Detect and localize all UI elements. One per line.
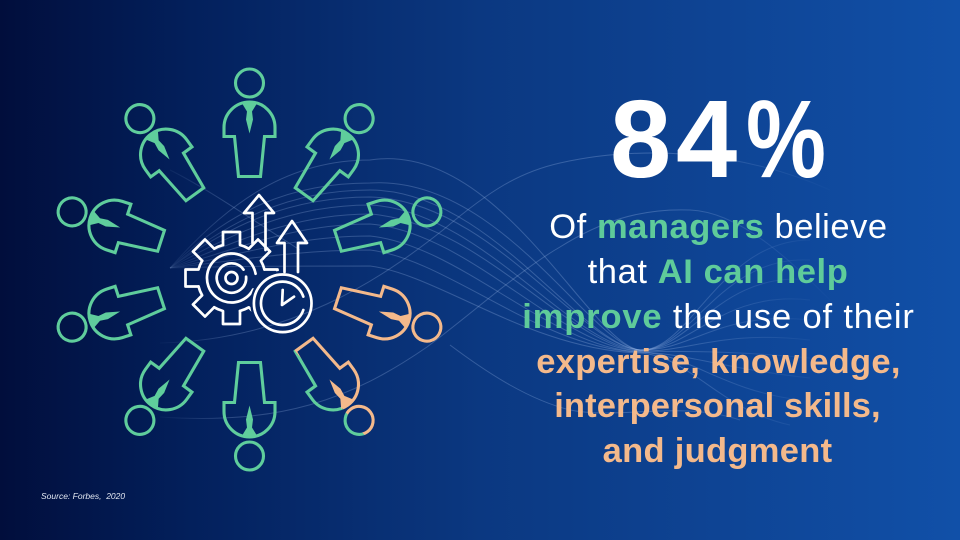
line 3: improve the use of their xyxy=(522,298,915,336)
line 4: expertise, knowledge, xyxy=(536,343,901,381)
line 5: interpersonal skills, xyxy=(554,387,881,425)
big number: % xyxy=(746,78,826,201)
source note: Source: Forbes, 2020 xyxy=(41,491,125,501)
icon: clock xyxy=(254,274,312,332)
person: left lower xyxy=(51,274,169,356)
icon: large arrow xyxy=(244,195,274,250)
person: bottom xyxy=(224,362,275,470)
person: right upper xyxy=(330,183,448,265)
person: lower right, half peach half green xyxy=(284,330,388,447)
icon: small arrow xyxy=(277,221,307,272)
person: upper left xyxy=(111,92,215,209)
big number xyxy=(610,78,826,201)
person: lower left xyxy=(111,330,215,447)
line 6: and judgment xyxy=(603,432,833,470)
person: right lower, peach xyxy=(330,274,448,356)
person: top xyxy=(224,69,275,176)
big number: 84 xyxy=(610,78,737,201)
person: left upper xyxy=(51,183,169,265)
line 1: Of managers believe xyxy=(549,208,888,246)
person: upper right xyxy=(284,92,388,209)
line 2: that AI can help xyxy=(588,253,848,291)
decorative wave lines xyxy=(160,153,830,425)
icon: gear xyxy=(186,232,278,324)
ring of ten people xyxy=(51,69,448,470)
statement text xyxy=(522,208,915,470)
icon: gear, growth arrows and clock xyxy=(186,195,312,332)
